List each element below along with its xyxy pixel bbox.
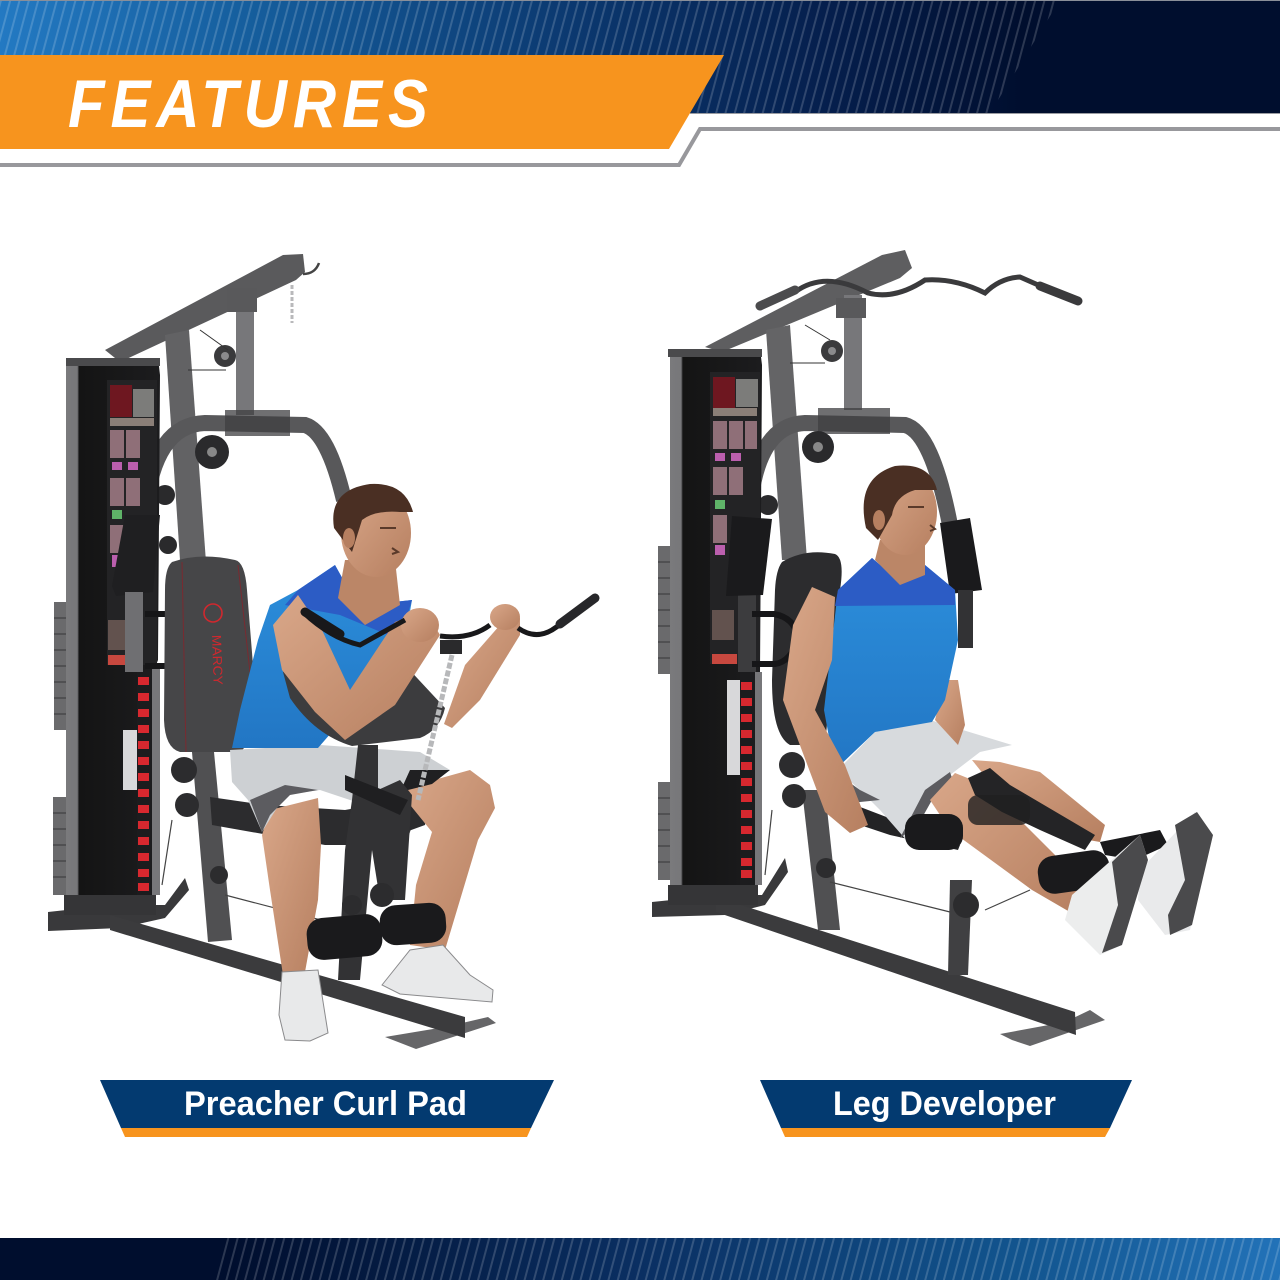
right weight tower xyxy=(668,349,762,905)
label: leg developer: Leg Developer xyxy=(833,1085,1056,1123)
right red weight numbers xyxy=(740,672,755,885)
shoes xyxy=(279,945,493,1041)
label: preacher curl pad: Preacher Curl Pad xyxy=(184,1085,467,1123)
right weight plates xyxy=(658,546,670,880)
curved press arm xyxy=(144,410,344,554)
man: head xyxy=(333,484,413,625)
arm pad and handle xyxy=(112,515,188,672)
right man: arm behind xyxy=(935,680,965,745)
footer band xyxy=(0,1238,1280,1280)
backrest logo xyxy=(204,604,222,622)
header band xyxy=(0,0,1280,114)
left machine with man: preacher curl xyxy=(48,254,595,1049)
weight tower xyxy=(64,358,160,915)
header rule xyxy=(0,129,1280,165)
backrest xyxy=(164,556,255,752)
leg rollers xyxy=(305,902,447,961)
right exercise poster xyxy=(710,372,760,664)
title: FEATURES xyxy=(68,65,428,142)
right man: far leg and shoe xyxy=(972,760,1213,935)
left weight plates xyxy=(53,602,66,895)
chain xyxy=(418,655,452,800)
preacher post xyxy=(338,745,412,980)
right man: near arm xyxy=(783,587,868,833)
leg developer arm and rollers xyxy=(905,768,1112,896)
man: arms xyxy=(273,595,520,740)
right pulleys xyxy=(765,752,979,918)
right handle and pads xyxy=(726,516,982,672)
preacher pad xyxy=(283,661,445,746)
lat bar xyxy=(760,277,1078,306)
man: torso shirt xyxy=(232,565,412,748)
right man: near leg xyxy=(930,773,1080,915)
label: preacher curl pad xyxy=(100,1080,554,1137)
right foot plate xyxy=(1000,1010,1105,1046)
man: legs and shorts xyxy=(230,745,495,975)
seat cushion xyxy=(210,795,430,845)
right curved press arm xyxy=(748,408,950,530)
base frame xyxy=(48,878,465,1038)
curl bar xyxy=(303,598,595,800)
top arm and uprights xyxy=(105,254,319,562)
right top arm and uprights xyxy=(705,250,912,560)
right man: head xyxy=(864,466,937,585)
backrest brand: MARCY xyxy=(209,635,226,685)
right man: shirt xyxy=(824,558,958,770)
right man: near shoe xyxy=(1065,835,1148,955)
right man: shorts xyxy=(835,720,1012,842)
exercise poster xyxy=(107,380,157,665)
right seat xyxy=(855,805,960,850)
right backrest xyxy=(772,552,842,745)
foot plate xyxy=(385,1017,496,1049)
seat column and pulleys xyxy=(162,752,420,942)
right machine with man: leg developer xyxy=(652,250,1213,1046)
label: leg developer xyxy=(760,1080,1132,1137)
title banner xyxy=(0,55,724,149)
red weight numbers xyxy=(137,670,152,895)
right base frame xyxy=(652,790,1076,1035)
